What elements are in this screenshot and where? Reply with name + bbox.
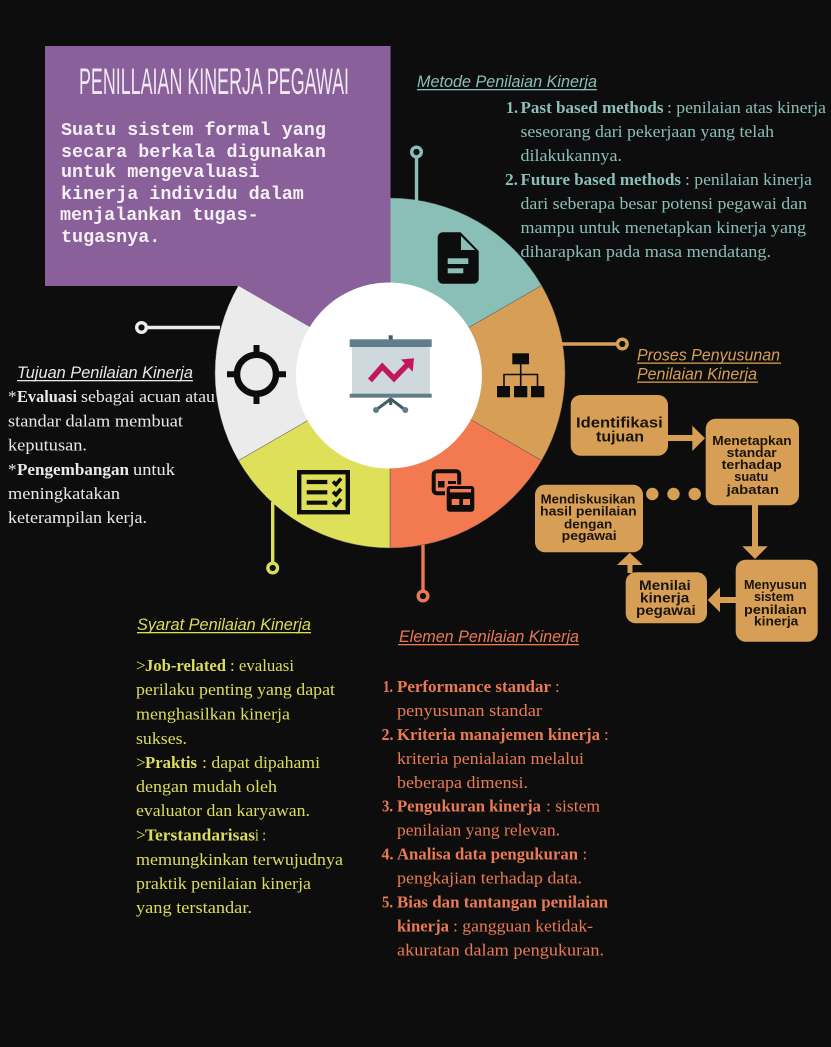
text block: dengan mudah oleh [136, 777, 278, 796]
flow step: mendiskusikan hasil: hasil penilaian [540, 504, 637, 519]
connector: white [137, 323, 220, 332]
list: Kriteria manajemen kinerja [397, 725, 600, 744]
flow step: mendiskusikan hasil: pegawai [562, 528, 617, 543]
heading: Elemen Penilaian Kinerja [399, 627, 579, 646]
dots connector [646, 488, 701, 500]
flow step: menetapkan standar: terhadap [722, 457, 782, 472]
definition text: secara berkala digunakan [61, 142, 326, 163]
text block: sukses. [136, 729, 187, 748]
arrow: step 1 to 2 [668, 426, 705, 451]
panel: title box: PENILLAIAN KINERJA PEGAWAI [79, 61, 349, 102]
list: dari seberapa besar potensi pegawai dan [520, 194, 808, 213]
segment: light grey [215, 286, 390, 460]
icon: layout windows [434, 471, 476, 514]
definition text [60, 120, 326, 248]
list: : [555, 677, 560, 696]
connector: teal [412, 147, 421, 201]
icon: presentation board [350, 335, 432, 413]
list: diharapkan pada masa mendatang. [520, 242, 771, 261]
text block: * [8, 387, 16, 406]
definition text: untuk mengevaluasi [61, 162, 260, 183]
text block: sebagai acuan atau [81, 387, 216, 406]
list: Pengukuran kinerja [397, 796, 541, 816]
list: 2. [505, 170, 518, 189]
flow step: identifikasi tujuan: tujuan [596, 429, 644, 446]
text block: keterampilan kerja. [8, 508, 147, 527]
list: dilakukannya. [520, 146, 622, 165]
list: Performance standar [397, 677, 551, 696]
flow step: identifikasi tujuan: Identifikasi [576, 414, 663, 431]
list: 1. [383, 677, 393, 696]
list: Analisa data pengukuran [397, 844, 579, 864]
text block: : dapat dipahami [202, 753, 320, 772]
segment: coral [390, 373, 542, 548]
definition text: menjalankan tugas- [60, 205, 259, 226]
donut chart [215, 198, 565, 548]
heading: Syarat Penilaian Kinerja [137, 615, 311, 634]
icon: org chart [497, 353, 544, 397]
segment: yellow [238, 373, 390, 548]
center circle [296, 282, 482, 468]
list: penyusunan standar [397, 701, 542, 720]
definition text: kinerja individu dalam [61, 184, 304, 205]
list: pengkajian terhadap data. [397, 868, 582, 888]
text block: Terstandarisas [145, 826, 255, 844]
purple panel shape [45, 46, 390, 373]
arrow: step 2 to 3 [742, 505, 768, 559]
panel: metode penilaian kinerja [417, 72, 826, 261]
list: : sistem [546, 796, 600, 816]
text block: Job-related [145, 656, 227, 675]
list: 5. [382, 892, 393, 912]
heading: Metode Penilaian Kinerja [417, 72, 597, 91]
heading: Proses Penyusunan [637, 346, 780, 364]
list: : penilaian atas kinerja [667, 98, 826, 117]
list: 4. [382, 844, 394, 864]
text block: Evaluasi [17, 387, 77, 406]
list: Bias dan tantangan penilaian [397, 892, 609, 912]
flow step: menilai kinerja: pegawai [636, 603, 696, 618]
flow step: menetapkan standar: Menetapkan [712, 433, 792, 448]
list: mampu untuk menetapkan kinerja yang [520, 218, 807, 237]
arrow: step 4 to 5 [617, 553, 643, 573]
segment: orange [390, 286, 565, 460]
flow step: menetapkan standar: suatu [734, 469, 768, 484]
list: Future based methods [520, 170, 681, 189]
list: 1. [506, 98, 518, 117]
panel: proses penyusunan penilaian kinerja [535, 346, 818, 642]
heading [637, 346, 781, 384]
text block: memungkinkan terwujudnya [136, 850, 343, 869]
flow step: mendiskusikan hasil: Mendiskusikan [541, 491, 635, 506]
list: : gangguan ketidak- [453, 916, 593, 936]
text block: Praktis [145, 753, 197, 772]
panel: tujuan penilaian kinerja [8, 363, 216, 527]
list: kinerja [397, 916, 449, 936]
list: : [604, 725, 609, 744]
panel: title box [45, 46, 390, 373]
icon: target [227, 345, 286, 404]
list [505, 98, 826, 261]
heading: Tujuan Penilaian Kinerja [17, 363, 193, 382]
text block: keputusan. [8, 436, 87, 454]
list: Past based methods [520, 98, 664, 117]
text block: * [8, 460, 16, 479]
text block: menghasilkan kinerja [136, 704, 290, 724]
flow step: menetapkan standar: jabatan [726, 482, 779, 497]
list [382, 677, 609, 960]
icon: checklist [299, 472, 348, 512]
text block: > [136, 753, 146, 772]
list: : [582, 844, 587, 864]
arrow: step 3 to 4 [708, 587, 736, 612]
text block: Pengembangan [17, 460, 130, 479]
flow step: menyusun sistem: penilaian [744, 602, 807, 617]
text block [8, 387, 216, 527]
flow step: menilai kinerja: kinerja [640, 591, 690, 606]
flow step: menyusun sistem: kinerja [754, 614, 799, 629]
list: 2. [382, 725, 394, 744]
definition text: tugasnya. [61, 227, 160, 248]
heading: Penilaian Kinerja [637, 364, 757, 384]
text block: > [136, 656, 146, 675]
list: 3. [382, 796, 393, 816]
text block: > [136, 826, 146, 844]
flow step: menyusun sistem: sistem [754, 589, 794, 604]
flow step: menilai kinerja: Menilai [639, 578, 691, 593]
text block [136, 656, 343, 917]
flow step: menetapkan standar: standar [727, 445, 777, 460]
text block: evaluator dan karyawan. [136, 801, 310, 820]
connector: yellow [268, 502, 278, 573]
text block: praktik penilaian kinerja [136, 874, 311, 893]
list: seseorang dari pekerjaan yang telah [520, 122, 775, 141]
text block: i : [255, 826, 266, 844]
flow step: menetapkan standar [706, 419, 799, 505]
text block: standar dalam membuat [8, 412, 183, 430]
panel: syarat penilaian kinerja [136, 615, 343, 917]
definition text: Suatu sistem formal yang [61, 120, 326, 141]
text block: : evaluasi [230, 656, 294, 675]
list: beberapa dimensi. [397, 773, 528, 792]
connector: coral [418, 545, 428, 601]
connector: orange [562, 339, 627, 349]
flow step: menilai kinerja [626, 572, 707, 623]
flow step: mendiskusikan hasil [535, 485, 643, 552]
list: akuratan dalam pengukuran. [397, 940, 604, 960]
flow step: menyusun sistem: Menyusun [744, 577, 807, 592]
list: kriteria penialaian melalui [397, 749, 584, 768]
flow step: mendiskusikan hasil: dengan [564, 516, 612, 531]
flow step: menyusun sistem [736, 560, 818, 642]
text block: meningkatakan [8, 484, 121, 503]
flow step: identifikasi tujuan [571, 395, 668, 456]
list: : penilaian kinerja [685, 170, 812, 189]
panel: elemen penilaian kinerja [382, 627, 609, 960]
list: penilaian yang relevan. [397, 820, 560, 840]
icon: document [438, 232, 479, 284]
text block: yang terstandar. [136, 898, 252, 917]
text block: untuk [133, 460, 176, 479]
segment: teal [390, 198, 542, 373]
text block: perilaku penting yang dapat [136, 680, 335, 699]
